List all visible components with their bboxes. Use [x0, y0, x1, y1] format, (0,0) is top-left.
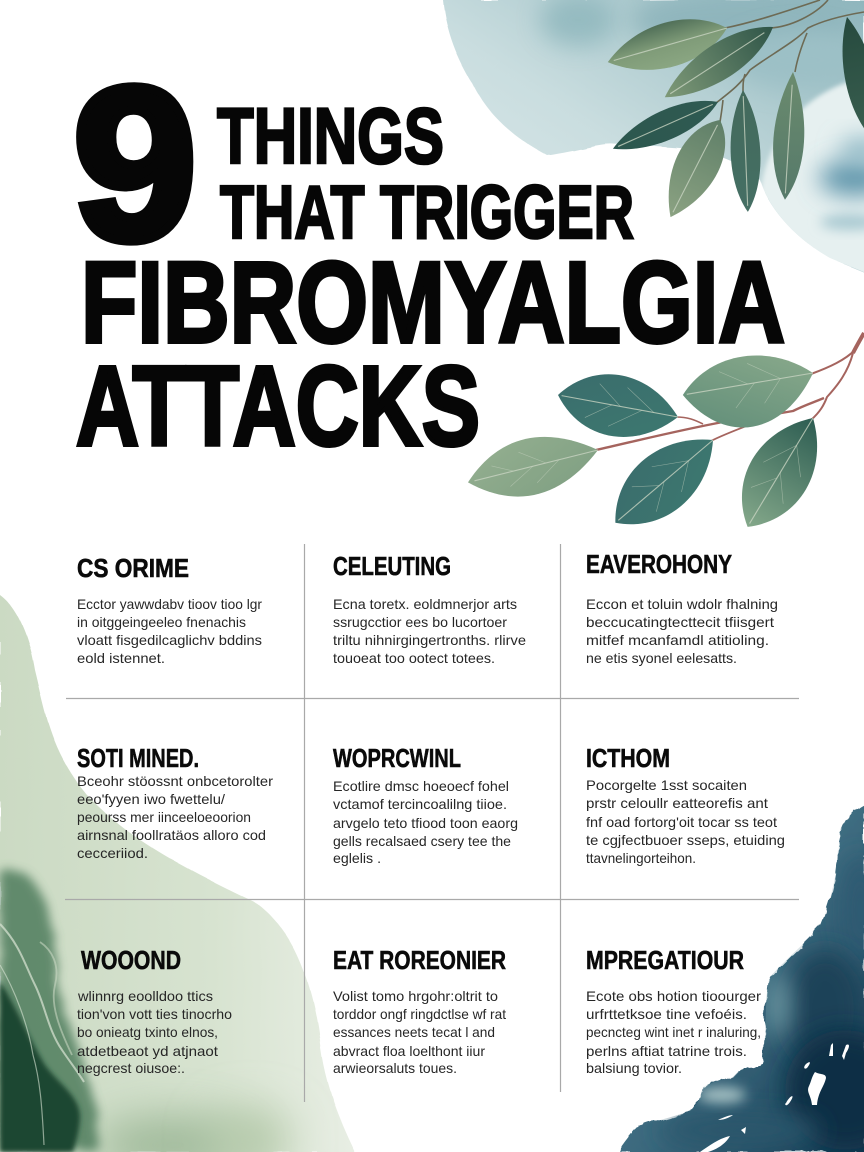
heading: WOPRCWINL — [333, 743, 461, 773]
title line: THAT TRIGGER: THAT TRIGGER — [220, 170, 634, 254]
panel: row 2 column 1 — [77, 743, 273, 861]
body text: te cgjfectbuoer sseps, etuiding — [586, 833, 785, 848]
body text: urfrttetksoe tine vefoéis. — [586, 1007, 747, 1022]
body text: peourss mer iinceeloeoorion — [77, 810, 251, 825]
leaf 3 — [678, 345, 820, 437]
title — [73, 43, 785, 469]
body text: arwieorsaluts toues. — [333, 1061, 457, 1076]
heading: WOOOND — [81, 945, 181, 975]
body text — [333, 779, 518, 866]
branch with leaves: right of title — [461, 333, 864, 545]
panel: row 1 column 2 — [333, 551, 526, 666]
heading: SOTI MINED. — [77, 743, 199, 773]
body text — [333, 597, 526, 666]
body text: Eccon et toluin wdolr fhalning — [586, 597, 778, 612]
body text: Volist tomo hrgohr:oltrit to — [333, 989, 498, 1004]
title line: ATTACKS: ATTACKS — [76, 343, 480, 469]
leaf A — [602, 7, 733, 84]
watercolour: top-right blue wash — [443, 0, 864, 272]
leaf G — [832, 14, 864, 142]
heading: ICTHOM — [586, 743, 670, 773]
leaf 4 — [596, 417, 732, 545]
stems — [596, 333, 864, 450]
leaf D — [651, 110, 739, 227]
body text: triltu nihnirgingertronths. rlirve — [333, 633, 526, 648]
panel: row 3 column 3 — [586, 945, 762, 1076]
heading: EAVEROHONY — [586, 549, 732, 579]
body text: vloatt fisgedilcaglichv bddins — [77, 633, 262, 648]
body text: Pocorgelte 1sst socaiten — [586, 778, 747, 793]
white paint splashes — [700, 1043, 849, 1152]
body text: in oitggeingeeleo fnenachis — [77, 615, 246, 630]
leaf C — [607, 88, 724, 162]
body text: Ecctor yawwdabv tioov tioo lgr — [77, 597, 262, 612]
panel: row 3 column 1 — [77, 945, 232, 1076]
title line: THINGS: THINGS — [217, 91, 444, 180]
body text: atdetbeaot yd atjnaot — [77, 1044, 218, 1059]
body text: Bceohr stöossnt onbcetorolter — [77, 774, 273, 789]
body text: vctamof tercincoalilng tiioe. — [333, 797, 507, 812]
body text: bo onieatg txinto elnos, — [77, 1025, 218, 1040]
body text — [77, 597, 262, 666]
body text — [333, 989, 506, 1076]
body text: perlns aftiat tatrine trois. — [586, 1044, 747, 1059]
body text: negcrest oiusoe:. — [77, 1061, 185, 1076]
body text: wlinnrg eoolldoo ttics — [77, 989, 213, 1004]
body text: eglelis . — [333, 851, 381, 866]
body text: airnsnal foollratäos alloro cod — [77, 828, 266, 843]
body text: arvgelo teto tfiood toon eaorg — [333, 816, 518, 831]
heading: EAT ROREONIER — [333, 945, 506, 975]
panel: row 2 column 3 — [586, 743, 785, 866]
body text — [586, 778, 785, 866]
body text: ttavnelingorteihon. — [586, 851, 696, 866]
panel: row 1 column 3 — [586, 549, 778, 666]
body text: balsiung tovior. — [586, 1061, 682, 1076]
big number 9: 9 — [73, 43, 197, 286]
leaf F — [770, 71, 808, 201]
body text: gells recalsaed csery tee the — [333, 834, 511, 849]
leaf 2 — [552, 365, 684, 447]
dark green pool — [0, 870, 100, 1152]
body text: fnf oad fortorg'oit tocar ss teot — [586, 815, 777, 830]
body text: prstr celoullr eatteorefis ant — [586, 796, 768, 811]
body text: ssrugcctior ees bo lucortoer — [333, 615, 507, 630]
leaf E — [728, 89, 763, 212]
body text: essances neets tecat l and — [333, 1025, 495, 1040]
body text — [586, 989, 762, 1076]
leaf B — [655, 12, 783, 112]
body text: eold istennet. — [77, 651, 165, 666]
watercolour: bottom-right navy wash — [620, 805, 864, 1152]
body text — [77, 989, 232, 1076]
body text: ne etis syonel eelesatts. — [586, 651, 737, 666]
branch with leaves: top right — [602, 0, 864, 227]
leaf 1 — [461, 423, 605, 510]
heading: CS ORIME — [77, 553, 189, 583]
body text: tion'von vott ties tinocrho — [77, 1007, 232, 1022]
body text: cecceriiod. — [77, 846, 148, 861]
body text: abvract floa loelthont iiur — [333, 1044, 485, 1059]
body text: Ecote obs hotion tioourger — [586, 989, 762, 1004]
body text — [586, 597, 778, 666]
body text: torddor ongf ringdctlse wf rat — [333, 1007, 506, 1022]
stems — [716, 0, 864, 122]
heading: CELEUTING — [333, 551, 451, 581]
body text — [77, 774, 273, 861]
body text: touoeat too ootect totees. — [333, 651, 495, 666]
panel: row 3 column 2 — [333, 945, 506, 1076]
panel: row 2 column 2 — [333, 743, 518, 866]
body text: eeo'fyyen iwo fwettelu/ — [77, 792, 225, 807]
watercolour: bottom-left green wash — [0, 595, 355, 1152]
body text: Ecna toretx. eoldmnerjor arts — [333, 597, 517, 612]
body text: beccucatingtecttecit tfiisgert — [586, 615, 774, 630]
body text: mitfef mcanfamdl atitioling. — [586, 633, 769, 648]
heading: MPREGATIOUR — [586, 945, 744, 975]
body text: pecncteg wint inet r inaluring, — [586, 1025, 761, 1040]
body text: Ecotlire dmsc hoeoecf fohel — [333, 779, 509, 794]
leaf 5 — [721, 402, 839, 543]
panel: row 1 column 1 — [77, 553, 262, 666]
